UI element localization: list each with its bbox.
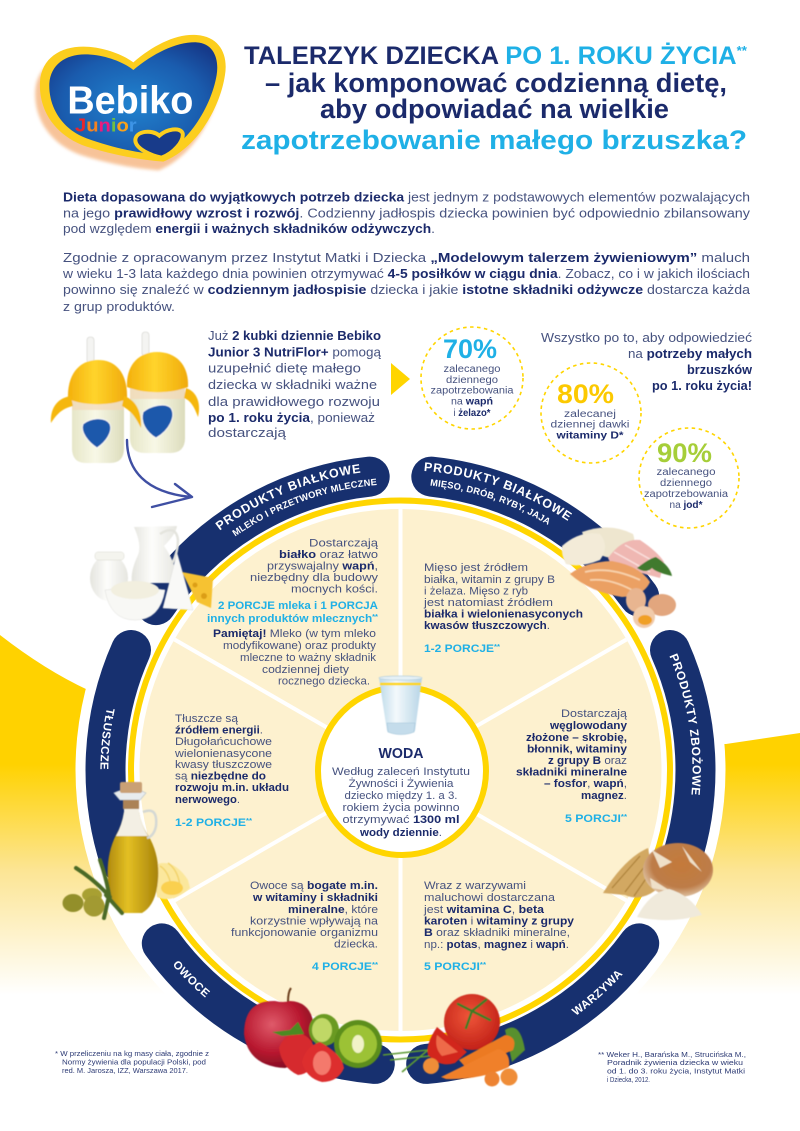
footnote: left: * W przeliczeniu na kg masy ciała, zgodnie z: [55, 1049, 209, 1058]
photo: meat, fish and eggs: [562, 527, 676, 628]
intro paragraph 2: [62, 251, 750, 314]
sector text: meat: Mięso jest źródłem: [424, 562, 528, 574]
plate: navy bands: [106, 477, 695, 1064]
sector text: vegetables: Wraz z warzywami: [424, 880, 526, 892]
intro paragraph 1: pod względem energii i ważnych składników odżywczych .: [63, 222, 435, 236]
title: TALERZYK DZIECKA PO 1. ROKU ŻYCIA: [244, 42, 732, 70]
sector text: dairy: **: [372, 614, 378, 621]
sector text: grains: węglowodany: [549, 720, 628, 732]
text: response to needs: po 1. roku życia!: [652, 379, 752, 393]
sector text: dairy: modyfikowane) oraz produkty: [223, 640, 377, 652]
intro paragraph 1: [63, 190, 751, 236]
photo: olive oil, olives and butter: [62, 782, 190, 918]
sector text: fruit: mineralne , które: [288, 904, 378, 916]
photo: dairy products: [90, 526, 213, 620]
photo: vegetables: [383, 994, 525, 1086]
sector text: grains: błonnik, witaminy: [527, 744, 628, 756]
footnote: left: red. M. Jarosza, IZZ, Warszawa 2017.: [62, 1066, 188, 1075]
sector text: grains: 5 PORCJI: [565, 813, 615, 825]
sector text: fats: Długołańcuchowe: [175, 736, 272, 748]
sector text: vegetables: **: [480, 962, 486, 969]
footnote: left: [55, 1049, 209, 1075]
footnote: right: Poradnik żywienia dziecka w wieku: [607, 1058, 743, 1067]
sector text: meat: [423, 562, 583, 655]
center circle: water: rokiem życia powinno: [342, 802, 460, 814]
callout: 90%: zapotrzebowania: [644, 489, 728, 500]
plate: yellow ring and beige disc: [131, 500, 670, 1040]
sector text: meat: **: [494, 644, 500, 651]
sector text: meat: białka, witamin z grupy B: [424, 574, 555, 586]
callout: 90%: dziennego: [660, 478, 712, 489]
sector text: grains: **: [621, 814, 627, 821]
callout: 70%: [421, 327, 523, 429]
footnote: right: od 1. do 3. roku życia, Instytut Matki: [607, 1066, 745, 1076]
footnote: right: ** Weker H., Barańska M., Strucińska M.,: [598, 1050, 746, 1059]
sector text: meat: białka i wielonienasyconych: [424, 608, 583, 620]
center circle: water: Według zaleceń Instytutu: [332, 766, 470, 778]
callout: 70%: zalecanego: [444, 364, 501, 375]
sector text: grains: złożone – skrobię,: [526, 732, 627, 744]
center circle: water: WODA: [378, 746, 424, 762]
text: two cups: Junior 3 NutriFlor+ pomogą: [208, 346, 381, 360]
arrow: blue hand-drawn: [127, 440, 192, 507]
callout: 80%: 80%: [557, 379, 614, 409]
callout: 80%: [541, 363, 641, 463]
sector text: grains: Dostarczają: [561, 708, 628, 720]
sector text: vegetables: B oraz składniki mineralne,: [424, 927, 570, 939]
center circle: water: wody dziennie .: [359, 827, 442, 839]
sector text: dairy: Pamiętaj! Mleko (w tym mleko: [213, 628, 376, 640]
callout: 70%: zapotrzebowania: [430, 386, 514, 396]
sector text: fruit: [231, 880, 379, 973]
footnote: right: [598, 1050, 746, 1084]
band label: meat: MIĘSO, DRÓB, RYBY, JAJA: [430, 479, 550, 525]
sector text: grains: składniki mineralne: [516, 766, 627, 778]
sector text: fruit: w witaminy i składniki: [252, 892, 378, 904]
intro paragraph 1: Dieta dopasowana do wyjątkowych potrzeb dziecka jest jednym z podstawowych elementów pozwalających: [63, 190, 750, 204]
center circle: water: Żywności i Żywienia: [348, 777, 454, 790]
sector text: dairy: Dostarczają: [309, 538, 379, 550]
sector text: fruit: 4 PORCJE: [312, 961, 366, 973]
text: two cups: po 1. roku życia , ponieważ: [208, 411, 375, 425]
sector text: fruit: Owoce są bogate m.in.: [250, 880, 378, 892]
band label: fruit: OWOCE: [174, 961, 210, 998]
logo: Bebiko Junior: [35, 35, 226, 170]
sector text: fruit: funkcjonowanie organizmu: [231, 927, 378, 939]
sector text: dairy: przyswajalny wapń ,: [267, 560, 378, 572]
sector text: grains: z grupy B oraz: [548, 755, 627, 767]
sector text: dairy: mocnych kości.: [291, 584, 378, 596]
sector text: vegetables: [423, 880, 575, 973]
center circle: water: dziecko między 1. a 3.: [344, 790, 458, 802]
sector text: dairy: mleczne to ważny składnik: [240, 652, 377, 664]
center circle: water: otrzymywać 1300 ml: [342, 814, 460, 826]
yellow gradient background: [0, 445, 800, 1095]
sector text: vegetables: jest witamina C , beta: [423, 904, 545, 916]
title: aby odpowiadać na wielkie: [320, 94, 669, 124]
callout: 90%: 90%: [657, 438, 712, 468]
sector text: grains: – fosfor , wapń,: [544, 778, 627, 790]
band label: dairy: PRODUKTY BIAŁKOWE: [215, 464, 360, 530]
text: two cups: dla prawidłowego rozwoju: [208, 395, 380, 409]
band label: meat: PRODUKTY BIAŁKOWE: [424, 462, 572, 521]
sector text: fruit: dziecka.: [334, 938, 378, 950]
photo: fruit: [244, 988, 382, 1082]
plate: white dividers: [174, 509, 626, 1031]
callout: 80%: zalecanej: [564, 409, 616, 420]
sector text: grains: magnez.: [581, 790, 627, 802]
sector text: meat: kwasów tłuszczowych .: [424, 620, 550, 632]
intro paragraph 1: na jego prawidłowy wzrost i rozwój . Codzienny jadłospis dziecka powinien być odpowiednio zbilansowany: [63, 206, 751, 220]
sector text: vegetables: maluchowi dostarczana: [424, 892, 556, 904]
icon: glass of water: [379, 676, 422, 734]
logo: Bebiko Junior: Bebiko: [67, 78, 193, 122]
text: response to needs: brzuszków: [687, 363, 752, 377]
sector text: dairy: innych produktów mlecznych: [207, 613, 361, 625]
callout: 70%: i żelazo*: [454, 408, 491, 419]
sector text: fats: [174, 713, 289, 829]
sector text: vegetables: np.: potas, magnez i wapń.: [424, 939, 569, 951]
sector text: fats: nerwowego.: [175, 794, 240, 806]
sector text: meat: i żelaza. Mięso z ryb: [424, 586, 528, 598]
intro paragraph 2: w wieku 1-3 lata każdego dnia powinien otrzymywać 4-5 posiłków w ciągu dnia . Zobacz, co i w jakich ilościach: [62, 267, 750, 281]
sector text: dairy: niezbędny dla budowy: [250, 572, 379, 584]
band label: fats: TŁUSZCZE: [100, 709, 115, 770]
text: two cups: Już 2 kubki dziennie Bebiko: [208, 329, 381, 343]
callout: 70%: 70%: [443, 334, 497, 364]
footnote: left: Normy żywienia dla populacji Polski, pod: [62, 1058, 206, 1066]
band label: grains: PRODUKTY ZBOŻOWE: [670, 653, 703, 795]
sector text: fats: kwasy tłuszczowe: [175, 759, 272, 771]
title: [241, 42, 748, 155]
sector text: grains: [516, 708, 628, 825]
sector text: fruit: **: [372, 962, 378, 969]
callout: 70%: dziennego: [446, 375, 498, 386]
text: two cups: dostarczają: [208, 426, 286, 440]
icon: two Bebiko cups: [51, 332, 199, 463]
sector text: vegetables: karoten i witaminy z grupy: [424, 916, 575, 928]
callout: 80%: dziennej dawki: [550, 420, 630, 430]
text: two cups: uzupełnić dietę małego: [208, 362, 361, 376]
callout: 90%: na jod*: [670, 500, 703, 511]
sector text: vegetables: 5 PORCJI: [424, 961, 474, 973]
callout: 70%: na wapń: [451, 396, 493, 408]
logo: Bebiko Junior: Junior: [75, 115, 137, 136]
text: two cups: dziecka w składniki ważne: [208, 378, 377, 392]
text: two cups: [208, 329, 381, 440]
sector text: dairy: [207, 538, 379, 688]
center circle: water: [318, 687, 486, 855]
photo: bread, oats and rice: [603, 843, 713, 920]
sector text: fats: **: [246, 818, 252, 825]
text: response to needs: [541, 331, 752, 393]
text: response to needs: na potrzeby małych: [628, 347, 752, 361]
sector text: fats: rozwoju m.in. układu: [175, 782, 289, 794]
sector text: fats: 1-2 PORCJE: [175, 817, 239, 829]
title: – jak komponować codzienną dietę,: [265, 68, 727, 98]
band label: vegetables: WARZYWA: [571, 971, 623, 1015]
sector text: dairy: 2 PORCJE mleka i 1 PORCJA: [218, 600, 378, 612]
arrow: yellow triangle: [391, 363, 410, 395]
sector text: meat: jest natomiast źródłem: [423, 597, 553, 609]
footnote: right: i Dziecka, 2012.: [607, 1075, 650, 1084]
intro paragraph 2: z grup produktów.: [63, 300, 175, 314]
text: response to needs: Wszystko po to, aby odpowiedzieć: [541, 331, 752, 345]
band label: dairy: MLEKO I PRZETWORY MLECZNE: [232, 478, 377, 536]
callout: 80%: witaminy D*: [555, 430, 624, 442]
sector text: fats: są niezbędne do: [175, 770, 266, 782]
intro paragraph 2: Zgodnie z opracowanym przez Instytut Matki i Dziecka „Modelowym talerzem żywieniowym” maluch: [63, 251, 750, 265]
sector text: dairy: białko oraz łatwo: [279, 549, 378, 561]
title: zapotrzebowanie małego brzuszka?: [241, 125, 747, 155]
sector text: fruit: korzystnie wpływają na: [250, 916, 379, 928]
callout: 90%: zalecanego: [656, 467, 716, 478]
sector text: dairy: codziennej diety: [262, 664, 350, 676]
sector text: fats: źródłem energii .: [175, 724, 263, 736]
title: **: [737, 43, 748, 58]
callout: 90%: [639, 428, 739, 528]
sector text: dairy: rocznego dziecka.: [278, 676, 370, 688]
sector text: fats: wielonienasycone: [174, 748, 272, 760]
sector text: fats: Tłuszcze są: [175, 713, 239, 725]
sector text: meat: 1-2 PORCJE: [424, 643, 488, 655]
intro paragraph 2: powinno się znaleźć w codziennym jadłospisie dziecka i jakie istotne składniki odżywcze dostarcza każda: [63, 283, 750, 297]
